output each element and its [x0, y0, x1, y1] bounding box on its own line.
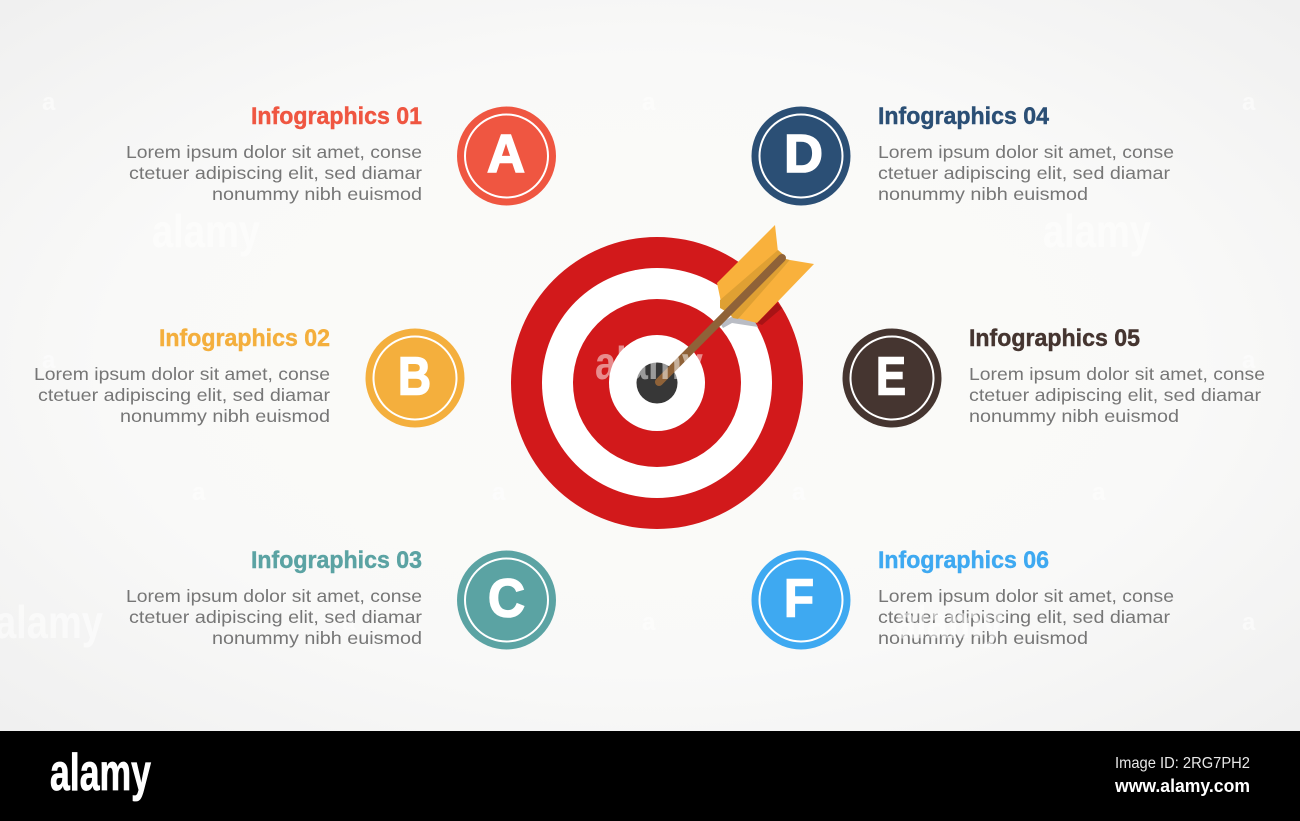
watermarks: a	[192, 479, 206, 506]
website: www.alamy.com	[1114, 776, 1250, 796]
text block 03: Lorem ipsum dolor sit amet, conse	[126, 586, 422, 606]
heading 04: Infographics 04	[878, 103, 1049, 130]
watermarks: a	[642, 89, 656, 116]
text block 02	[34, 364, 330, 426]
badge E: E	[876, 346, 906, 406]
footer logo: alamy	[50, 744, 151, 802]
badge A: A	[487, 124, 525, 184]
text block 01: ctetuer adipiscing elit, sed diamar	[129, 163, 422, 183]
text block 05: ctetuer adipiscing elit, sed diamar	[969, 385, 1261, 405]
watermarks	[0, 89, 1256, 648]
panel: item F	[752, 547, 1174, 650]
text block 06: nonummy nibh euismod	[878, 628, 1088, 648]
text block 06: ctetuer adipiscing elit, sed diamar	[878, 607, 1170, 627]
watermarks: a	[1242, 347, 1256, 374]
badge F: F	[784, 568, 814, 628]
text block 02: nonummy nibh euismod	[120, 406, 330, 426]
heading 06: Infographics 06	[878, 547, 1049, 574]
badge D	[752, 106, 850, 206]
text block 01: Lorem ipsum dolor sit amet, conse	[126, 142, 422, 162]
badge F	[752, 550, 850, 650]
watermarks: a	[1242, 89, 1256, 116]
panel: item A	[126, 103, 556, 206]
text block 04	[878, 142, 1174, 204]
text block 04: ctetuer adipiscing elit, sed diamar	[878, 163, 1170, 183]
footer bar	[0, 731, 1300, 821]
watermarks over content: alamy	[895, 596, 1003, 648]
text block 01	[126, 142, 422, 204]
text block 04: Lorem ipsum dolor sit amet, conse	[878, 142, 1174, 162]
panel: item C	[126, 547, 556, 650]
panel: item B	[34, 325, 464, 428]
text block 04: nonummy nibh euismod	[878, 184, 1088, 204]
watermarks over content: alamy	[595, 337, 703, 389]
watermarks: alamy	[152, 205, 260, 257]
heading 02: Infographics 02	[159, 325, 330, 352]
badge B	[366, 328, 464, 428]
watermarks: a	[642, 609, 656, 636]
image id: Image ID: 2RG7PH2	[1115, 755, 1250, 772]
arrow icon	[659, 225, 814, 382]
text block 03	[126, 586, 422, 648]
panel: item D	[752, 103, 1174, 206]
watermarks: a	[42, 347, 56, 374]
badge A	[457, 106, 556, 206]
watermarks: a	[1092, 479, 1106, 506]
text block 02: ctetuer adipiscing elit, sed diamar	[38, 385, 330, 405]
text block 05: Lorem ipsum dolor sit amet, conse	[969, 364, 1265, 384]
text block 05	[969, 364, 1265, 426]
text block 01: nonummy nibh euismod	[212, 184, 422, 204]
watermarks: a	[492, 479, 506, 506]
heading 03: Infographics 03	[251, 547, 422, 574]
watermarks: a	[1242, 609, 1256, 636]
watermarks: a	[792, 479, 806, 506]
watermarks: alamy	[1043, 205, 1151, 257]
badge C	[457, 550, 556, 650]
text block 06	[878, 586, 1174, 648]
heading 05: Infographics 05	[969, 325, 1140, 352]
badge B: B	[398, 346, 431, 406]
watermarks over content	[342, 337, 1003, 648]
watermarks over content: a	[342, 609, 356, 636]
panel: item E	[842, 325, 1265, 428]
heading 01: Infographics 01	[251, 103, 422, 130]
text block 06: Lorem ipsum dolor sit amet, conse	[878, 586, 1174, 606]
text block 05: nonummy nibh euismod	[969, 406, 1179, 426]
watermarks: a	[42, 89, 56, 116]
text block 02: Lorem ipsum dolor sit amet, conse	[34, 364, 330, 384]
text block 03: nonummy nibh euismod	[212, 628, 422, 648]
text block 03: ctetuer adipiscing elit, sed diamar	[129, 607, 422, 627]
badge C: C	[488, 568, 525, 628]
badge D: D	[784, 124, 823, 184]
target icon	[511, 237, 803, 529]
badge E	[842, 328, 942, 428]
